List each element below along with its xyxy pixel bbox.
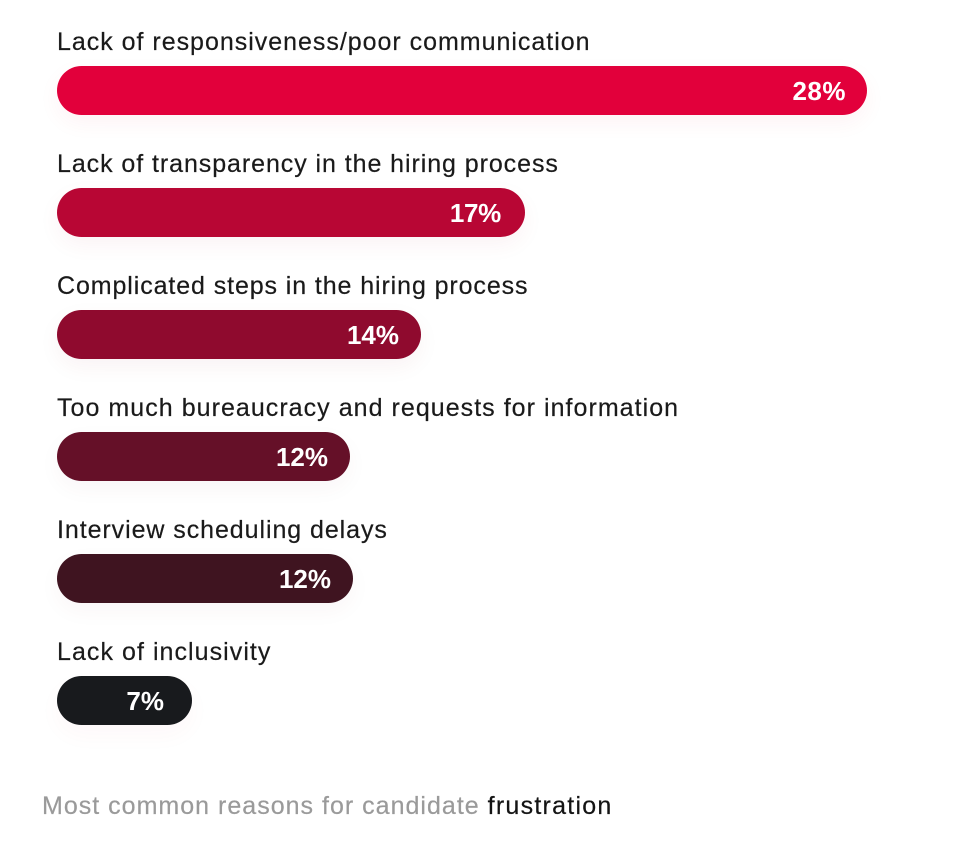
bar: 28%: 28% <box>792 76 846 106</box>
label: responsiveness: Lack of responsiveness/poor communication <box>57 28 590 56</box>
bar: 28% <box>57 66 867 115</box>
bar: 12% (bureaucracy) <box>57 432 350 481</box>
bar: 12% (bureaucracy): 12% <box>276 442 328 472</box>
row: responsiveness 28% <box>57 28 867 118</box>
bar: 7% <box>57 676 192 725</box>
bar: 12% (scheduling) <box>57 554 353 603</box>
row: inclusivity 7% <box>57 638 271 725</box>
row: bureaucracy 12% <box>57 394 679 481</box>
row: scheduling delays 12% <box>57 516 388 603</box>
bar: 14%: 14% <box>347 320 399 350</box>
row: complicated steps 14% <box>57 272 528 362</box>
caption: Most common reasons for candidate frustration <box>42 792 613 820</box>
bar: 17%: 17% <box>450 198 501 228</box>
label: complicated steps: Complicated steps in the hiring process <box>57 272 528 300</box>
bar: 7%: 7% <box>126 686 164 716</box>
bar: 17% <box>57 188 525 237</box>
label: scheduling delays: Interview scheduling delays <box>57 516 388 544</box>
bar: 12% (scheduling): 12% <box>279 564 331 594</box>
bar: 14% <box>57 310 421 359</box>
row: transparency 17% <box>57 150 559 240</box>
label: transparency: Lack of transparency in the hiring process <box>57 150 559 178</box>
label: bureaucracy: Too much bureaucracy and requests for information <box>57 394 679 422</box>
label: inclusivity: Lack of inclusivity <box>57 638 271 666</box>
